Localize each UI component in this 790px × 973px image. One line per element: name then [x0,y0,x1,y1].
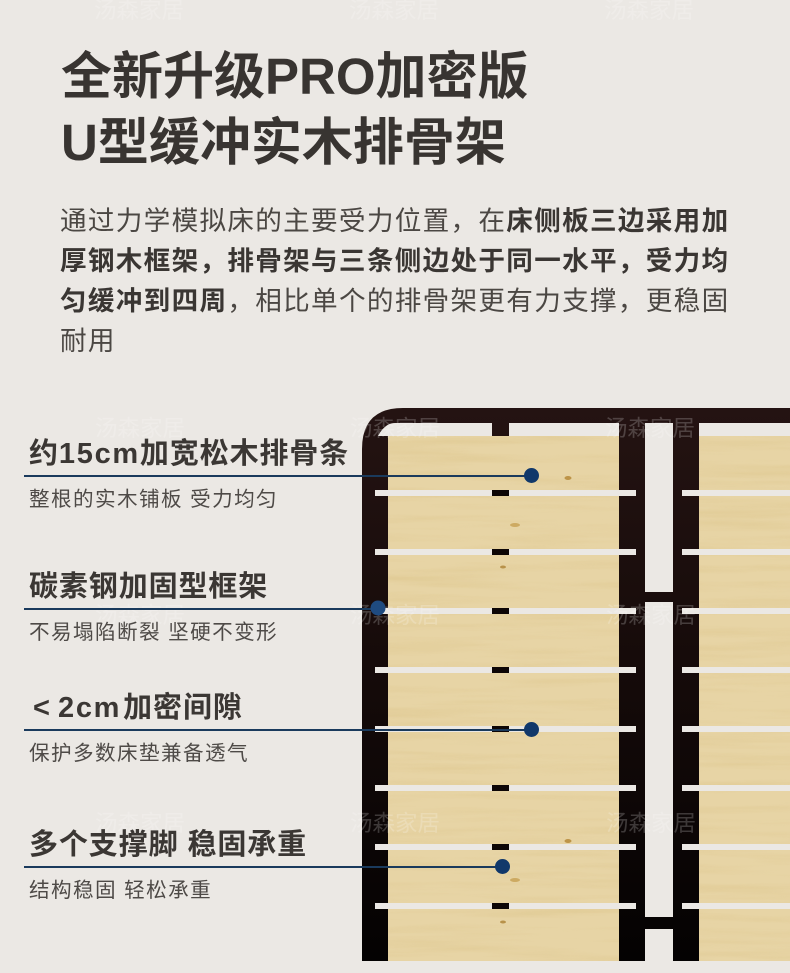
callout: gap under 2cm: 2cm [58,692,121,724]
steel frame [362,408,790,961]
callout: pine slats [24,437,539,511]
watermarks [94,0,696,836]
title: 全新升级PRO加密版 [61,48,529,105]
watermarks: 汤森家居 [95,603,185,628]
callout: gap under 2cm: 加密间隙 [123,691,243,724]
callout: support feet: 多个支撑脚 稳固承重 [29,828,307,861]
callout: steel frame [24,570,386,644]
title [61,48,529,171]
intro paragraph: 耐用 [60,326,116,356]
callout: steel frame: 碳素钢加固型框架 [29,570,268,603]
watermarks: 汤森家居 [95,416,185,441]
callout: gap under 2cm: < [33,692,51,724]
watermarks: 汤森家居 [350,811,440,836]
gaps between slats [375,490,790,909]
callout: pine slats: 约15cm加宽松木排骨条 [29,437,349,470]
callout: gap under 2cm: 保护多数床垫兼备透气 [29,742,249,765]
title: U型缓冲实木排骨架 [61,114,506,171]
slatted bed frame illustration [362,408,790,961]
intro paragraph [60,206,729,356]
watermarks: 汤森家居 [605,416,695,441]
centre support beam [492,490,509,909]
callout: gap under 2cm [24,691,539,765]
watermarks: 汤森家居 [350,416,440,441]
intro paragraph: 匀缓冲到四周，相比单个的排骨架更有力支撑，更稳固 [60,286,729,316]
watermarks: 汤森家居 [606,811,696,836]
intro paragraph: 通过力学模拟床的主要受力位置，在床侧板三边采用加 [60,206,729,236]
watermarks: 汤森家居 [95,811,185,836]
pine wood slats [388,436,790,961]
watermarks: 汤森家居 [606,603,696,628]
callout: pine slats: 整根的实木铺板 受力均匀 [29,488,278,511]
callout: steel frame: 不易塌陷断裂 坚硬不变形 [29,621,278,644]
watermarks: 汤森家居 [350,603,440,628]
callout: support feet [24,828,510,902]
callout: support feet: 结构稳固 轻松承重 [29,879,212,902]
intro paragraph: 厚钢木框架，排骨架与三条侧边处于同一水平，受力均 [60,246,729,276]
